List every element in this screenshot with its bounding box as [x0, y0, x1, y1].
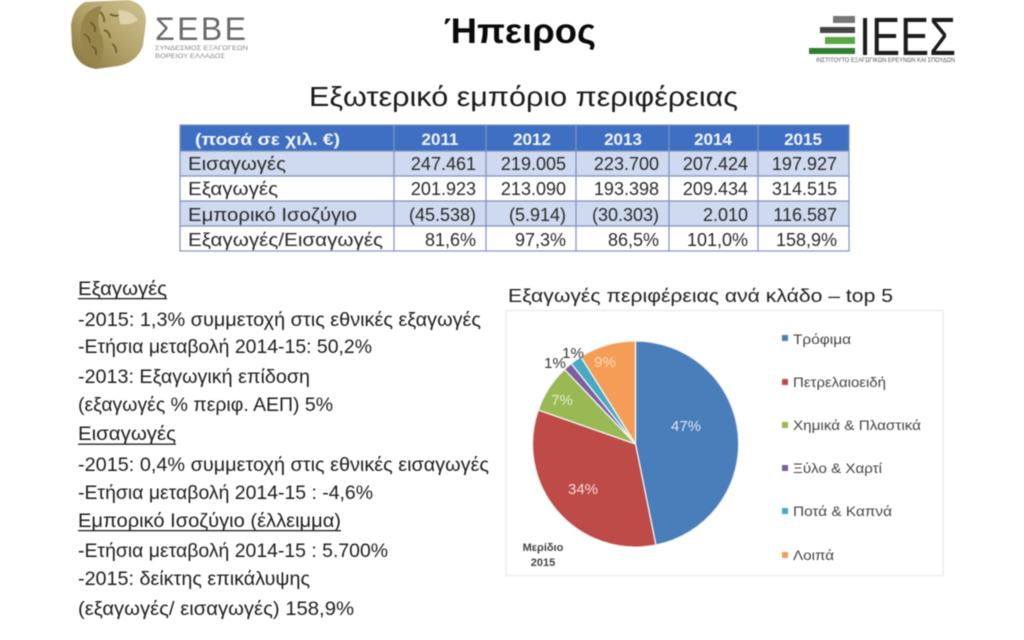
- row: trade balance: (45.538): [409, 205, 476, 225]
- trade balance bullet points: -2015: δείκτης επικάλυψης: [78, 569, 310, 590]
- row: trade balance: (30.303): [592, 205, 659, 225]
- imports bullet points: -Ετήσια μεταβολή 2014-15 : -4,6%: [78, 483, 373, 504]
- row: imports: 219.005: [501, 154, 566, 174]
- exports bullet points: -2015: 1,3% συμμετοχή στις εθνικές εξαγωγές: [78, 310, 481, 331]
- logo: IEES: [809, 7, 956, 67]
- exports bullet points: -2013: Εξαγωγική επίδοση: [78, 367, 310, 388]
- table header: 2012: [513, 130, 551, 149]
- chart title: Εξαγωγές περιφέρειας ανά κλάδο – top 5: [508, 285, 893, 306]
- logo: SEVE: ΒΟΡΕΙΟΥ ΕΛΛΑΔΟΣ: [155, 53, 225, 60]
- legend: Λοιπά: [793, 547, 834, 563]
- row: exports to imports: 158,9%: [776, 230, 837, 250]
- pie data labels: 34%: [568, 481, 598, 498]
- row: imports: Εισαγωγές: [188, 154, 286, 174]
- row: exports to imports: [188, 230, 837, 250]
- row: exports to imports: 97,3%: [515, 230, 566, 250]
- row: exports: [188, 179, 837, 199]
- row: exports to imports: 81,6%: [425, 230, 476, 250]
- row: imports: [188, 154, 837, 174]
- chart note: share 2015: 2015: [531, 557, 555, 569]
- row: exports: 213.090: [501, 179, 566, 199]
- legend: Ποτά & Καπνά: [793, 503, 892, 519]
- row: trade balance: 2.010: [703, 205, 748, 225]
- table header: [195, 130, 822, 149]
- legend: Χημικά & Πλαστικά: [793, 417, 921, 433]
- row: imports: 197.927: [772, 154, 837, 174]
- pie data labels: 47%: [671, 418, 701, 435]
- legend: Ξύλο & Χαρτί: [793, 460, 882, 476]
- trade balance bullet points: -Ετήσια μεταβολή 2014-15 : 5.700%: [78, 541, 388, 562]
- row: exports to imports: 86,5%: [608, 230, 659, 250]
- table backgrounds: [180, 125, 849, 251]
- exports bullet points: (εξαγωγές % περιφ. ΑΕΠ) 5%: [78, 395, 333, 416]
- table header: 2013: [604, 130, 642, 149]
- icon: gold medallion: [71, 0, 146, 69]
- row: trade balance: [188, 205, 837, 225]
- row: exports: Εξαγωγές: [188, 179, 278, 199]
- logo tagline: ΙΝΣΤΙΤΟΥΤΟ ΕΞΑΓΩΓΙΚΩΝ ΕΡΕΥΝΩΝ ΚΑΙ ΣΠΟΥΔΩΝ: [816, 58, 955, 64]
- table header: 2014: [694, 130, 732, 149]
- logo wordmark: ΙΕΕΣ: [859, 7, 956, 67]
- legend: [782, 331, 921, 563]
- logo wordmark: ΣΕΒΕ: [155, 11, 246, 47]
- pie data labels: 7%: [551, 392, 573, 409]
- row: trade balance: Εμπορικό Ισοζύγιο: [188, 205, 357, 225]
- logo tagline: ΣΥΝΔΕΣΜΟΣ ΕΞΑΓΩΓΕΩΝ: [155, 45, 248, 52]
- row: imports: 207.424: [683, 154, 748, 174]
- panel: pie chart: [506, 310, 943, 576]
- row: exports: 193.398: [594, 179, 659, 199]
- row: exports to imports: 101,0%: [687, 230, 748, 250]
- legend: Πετρελαιοειδή: [793, 374, 886, 390]
- text block: trade notes: [78, 279, 489, 620]
- row: exports: 314.515: [772, 179, 837, 199]
- pie data labels: [544, 345, 701, 498]
- row: exports: 209.434: [683, 179, 748, 199]
- chart note: share 2015: Μερίδιο: [523, 542, 564, 554]
- imports bullet points: -2015: 0,4% συμμετοχή στις εθνικές εισαγωγές: [78, 455, 489, 476]
- pie data labels: 9%: [594, 354, 616, 371]
- table: foreign trade: [180, 125, 849, 251]
- trade balance bullet points: (εξαγωγές/ εισαγωγές) 158,9%: [78, 599, 354, 620]
- chart note: share 2015: [523, 542, 564, 569]
- row: trade balance: (5.914): [509, 205, 566, 225]
- title: Ήπειρος: [444, 12, 596, 51]
- exports bullet points: -Ετήσια μεταβολή 2014-15: 50,2%: [78, 337, 372, 358]
- heading: trade balance: Εμπορικό Ισοζύγιο (έλλειμμα): [78, 511, 341, 532]
- pie data labels: 1%: [562, 345, 584, 362]
- trade balance bullet points: [78, 541, 388, 620]
- panel background: [506, 310, 943, 576]
- row: imports: 223.700: [594, 154, 659, 174]
- logo: SEVE: [71, 0, 248, 69]
- table header: 2015: [784, 130, 822, 149]
- row: exports: 201.923: [411, 179, 476, 199]
- exports bullet points: [78, 310, 481, 416]
- legend: Τρόφιμα: [793, 331, 851, 347]
- table header: 2011: [422, 130, 458, 149]
- pie chart: [533, 341, 739, 547]
- icon: stacked bars: [809, 16, 855, 54]
- imports bullet points: [78, 455, 489, 504]
- row: exports to imports: Εξαγωγές/Εισαγωγές: [188, 230, 383, 250]
- heading: imports: Εισαγωγές: [78, 424, 176, 445]
- row: trade balance: 116.587: [773, 205, 837, 225]
- heading: exports: Εξαγωγές: [78, 279, 167, 300]
- pie data labels: 1%: [544, 355, 566, 372]
- table header: (ποσά σε χιλ. €): [195, 130, 340, 149]
- subtitle: Εξωτερικό εμπόριο περιφέρειας: [309, 81, 738, 112]
- row: imports: 247.461: [411, 154, 476, 174]
